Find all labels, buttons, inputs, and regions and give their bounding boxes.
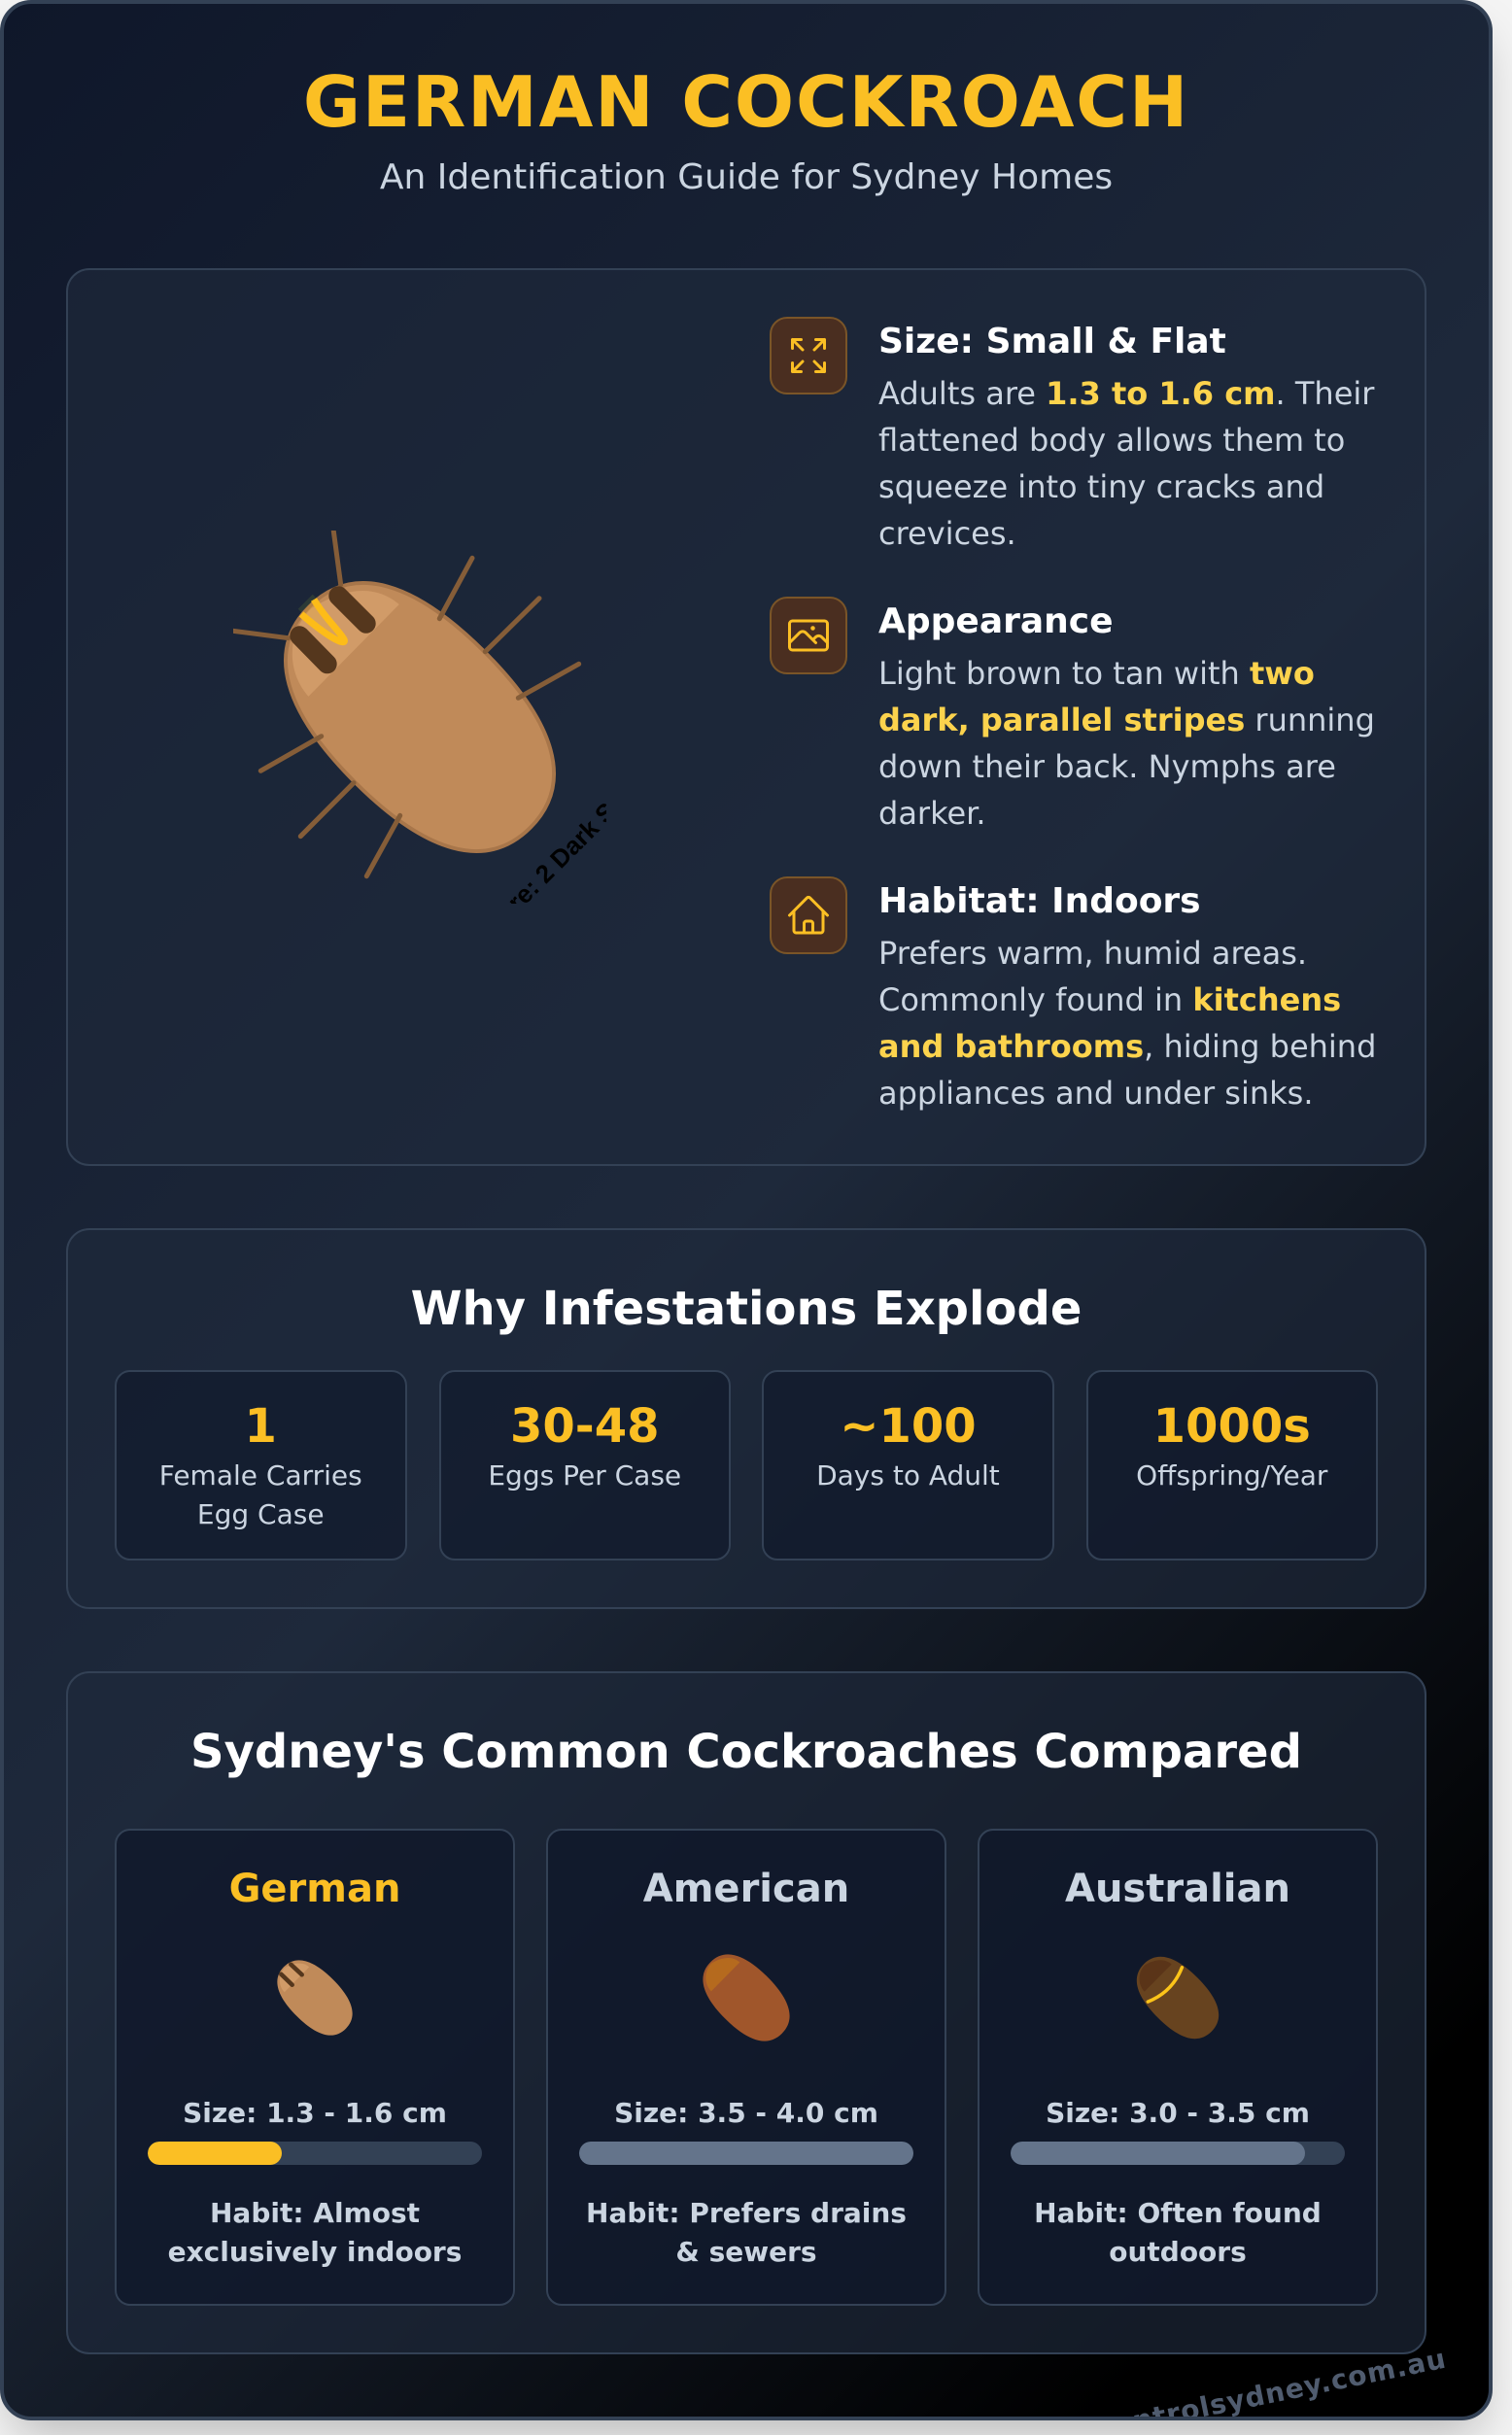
habit: Habit: Often found [1034, 2197, 1322, 2229]
heading: size: Size: Small & Flat [878, 322, 1226, 361]
habit: & sewers [675, 2236, 817, 2268]
text: habitat: Prefers warm, humid areas. [878, 935, 1307, 972]
size label: Size: 1.3 - 1.6 cm [183, 2097, 447, 2129]
icon: australian cockroach [1137, 1957, 1219, 2039]
icon: american cockroach [703, 1954, 790, 2041]
text: habitat [878, 935, 1376, 1112]
label: Female Carries [159, 1459, 362, 1492]
illustration: german cockroach [233, 531, 606, 904]
habit [1034, 2197, 1322, 2268]
icon: habitat house [770, 876, 847, 954]
number: 1000s [1153, 1399, 1311, 1454]
habit: Habit: Almost [210, 2197, 420, 2229]
text: appearance: down their back. Nymphs are [878, 748, 1336, 785]
size label: Size: 3.5 - 4.0 cm [614, 2097, 878, 2129]
habit: Habit: Prefers drains [586, 2197, 907, 2229]
label: Offspring/Year [1136, 1459, 1327, 1492]
text: habitat: appliances and under sinks. [878, 1075, 1314, 1112]
stat: female egg case [115, 1370, 406, 1560]
size bar [579, 2142, 913, 2165]
text: appearance [878, 655, 1375, 832]
text: size: crevices. [878, 515, 1016, 552]
column: german [115, 1829, 515, 2306]
text: habitat: and bathrooms, hiding behind [878, 1028, 1376, 1065]
size bar [148, 2142, 482, 2165]
text: appearance: darker. [878, 795, 986, 832]
text: size [878, 375, 1374, 552]
name: German [229, 1867, 400, 1911]
text: habitat: Commonly found in kitchens [878, 981, 1341, 1018]
size bar [1011, 2142, 1345, 2165]
text: appearance: Light brown to tan with two [878, 655, 1315, 692]
habit [168, 2197, 462, 2268]
icon: size arrows [770, 317, 847, 394]
text: size: Adults are 1.3 to 1.6 cm. Their [878, 375, 1374, 412]
habit [586, 2197, 907, 2268]
heading: appearance: Appearance [878, 601, 1114, 641]
habit: exclusively indoors [168, 2236, 462, 2268]
heading: Sydney's Common Cockroaches Compared [190, 1724, 1302, 1778]
panel: why infestations explode [66, 1228, 1426, 1609]
text: appearance: dark, parallel stripes running [878, 702, 1375, 738]
column: australian [978, 1829, 1378, 2306]
icon: appearance picture [770, 597, 847, 674]
heading: Why Infestations Explode [411, 1281, 1082, 1335]
name: American [643, 1867, 849, 1911]
label: Egg Case [197, 1498, 325, 1530]
panel: identification [66, 268, 1426, 1166]
label: Days to Adult [816, 1459, 1000, 1492]
number: 30-48 [510, 1399, 659, 1454]
stat: eggs per case [439, 1370, 731, 1560]
label [159, 1459, 362, 1530]
title: GERMAN COCKROACH [303, 61, 1189, 143]
label: Eggs Per Case [488, 1459, 681, 1492]
panel: species comparison [66, 1671, 1426, 2354]
stat: days to adult [762, 1370, 1054, 1560]
heading: habitat: Habitat: Indoors [878, 881, 1201, 921]
column: american [546, 1829, 946, 2306]
subtitle: An Identification Guide for Sydney Homes [380, 157, 1113, 197]
number: ~100 [840, 1399, 977, 1454]
size label: Size: 3.0 - 3.5 cm [1046, 2097, 1310, 2129]
habit: outdoors [1109, 2236, 1247, 2268]
name: Australian [1065, 1867, 1290, 1911]
stat: offspring per year [1086, 1370, 1378, 1560]
number: 1 [245, 1399, 277, 1454]
text: size: flattened body allows them to [878, 422, 1345, 459]
icon: german cockroach [277, 1960, 353, 2036]
text: size: squeeze into tiny cracks and [878, 468, 1324, 505]
